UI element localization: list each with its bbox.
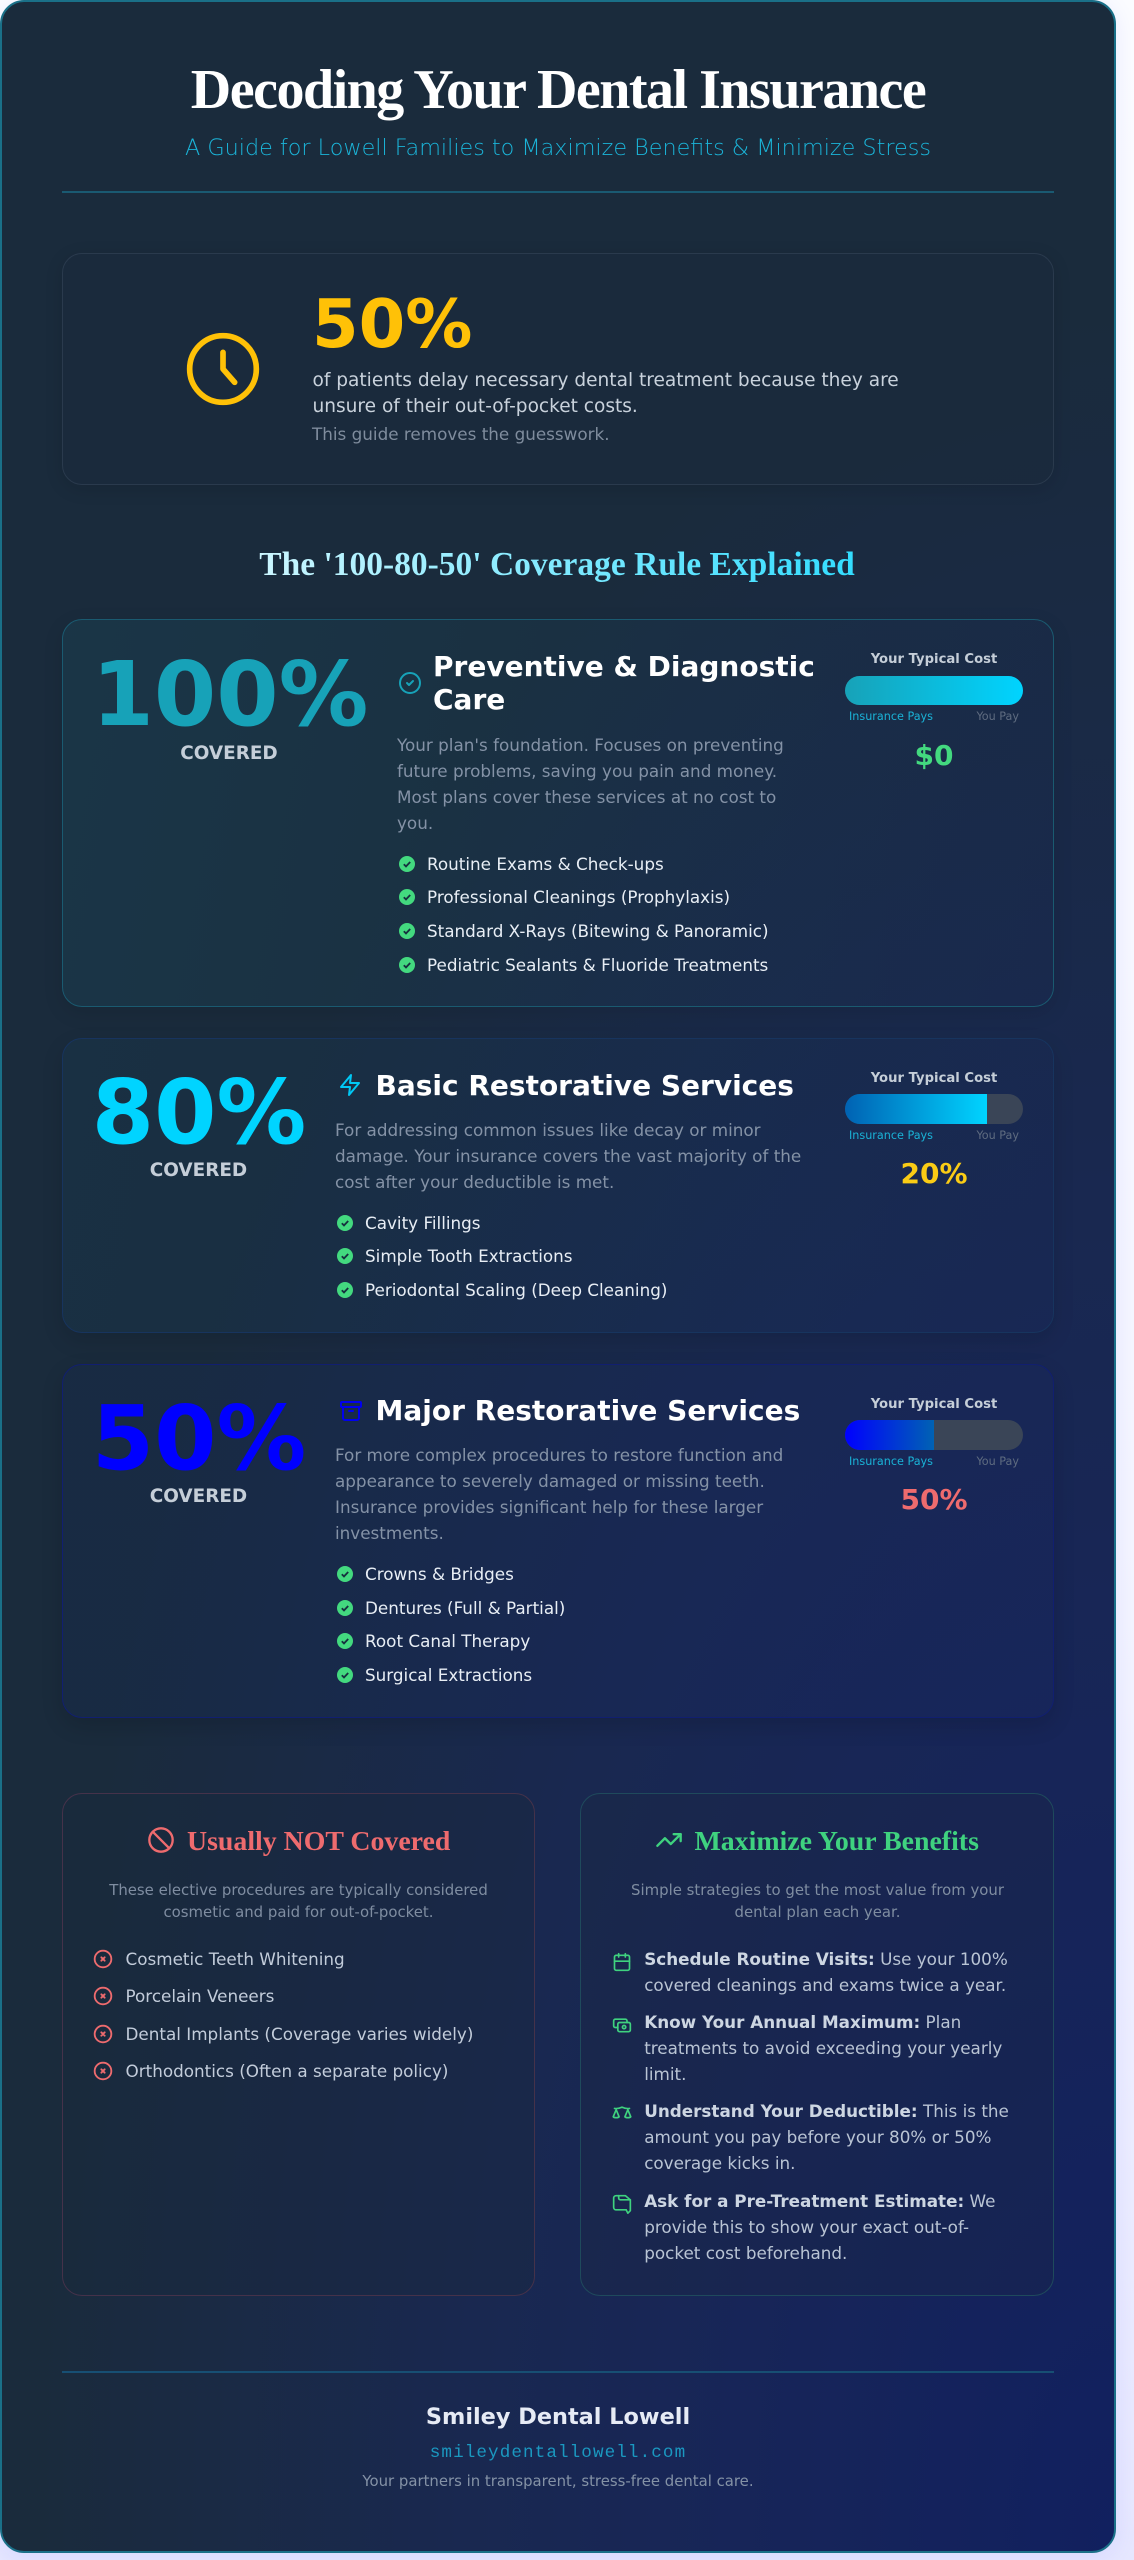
tagline: Your partners in transparent, stress-free dental care.	[362, 2472, 754, 2490]
cost value: $0	[915, 739, 953, 772]
tip text	[644, 1949, 1008, 1995]
footer divider	[62, 2371, 1054, 2373]
coverage percent: 80%	[92, 1061, 306, 1165]
list item: Crowns & Bridges	[365, 1564, 514, 1584]
panel description	[631, 1881, 1004, 1921]
statistic note: This guide removes the guesswork.	[312, 424, 610, 444]
panel heading: Maximize Your Benefits	[694, 1826, 979, 1856]
statistic number: 50%	[312, 285, 472, 363]
card heading: Basic Restorative Services	[376, 1069, 794, 1102]
tip: understand your deductible	[612, 2101, 1009, 2173]
list item: Root Canal Therapy	[365, 1631, 530, 1651]
footer	[0, 2371, 1116, 2501]
header	[62, 59, 1054, 193]
title: Decoding Your Dental Insurance	[191, 59, 925, 121]
tip text: provide this to show your exact out-of-	[644, 2217, 969, 2237]
tip text: Schedule Routine Visits: Use your 100%	[644, 1949, 1008, 1969]
cost label: Your Typical Cost	[871, 1070, 997, 1086]
panel: 80% basic restorative services	[62, 1038, 1054, 1333]
card heading: Major Restorative Services	[376, 1394, 800, 1427]
list item: Cosmetic Teeth Whitening	[126, 1949, 345, 1969]
card description	[335, 1120, 801, 1192]
icon: cash	[612, 2018, 632, 2032]
tip text: coverage kicks in.	[644, 2153, 795, 2173]
section heading: The '100-80-50' Coverage Rule Explained	[259, 546, 855, 583]
list item: Pediatric Sealants & Fluoride Treatments	[427, 954, 768, 974]
list item: Professional Cleanings (Prophylaxis)	[427, 887, 730, 907]
panel: 50% statistic hero	[62, 253, 1054, 485]
coverage label: COVERED	[150, 1160, 247, 1181]
card description	[397, 735, 784, 833]
card description: For addressing common issues like decay or minor	[335, 1120, 761, 1140]
panel description: cosmetic and paid for out-of-pocket.	[164, 1903, 434, 1921]
coverage percent: 100%	[92, 643, 368, 747]
statistic description	[312, 370, 899, 416]
statistic description: of patients delay necessary dental treatment because they are	[312, 370, 899, 390]
list: not covered items	[94, 1949, 473, 2081]
bar label: insurance pays: Insurance Pays	[849, 710, 933, 723]
card description: investments.	[335, 1523, 444, 1543]
clinic name: Smiley Dental Lowell	[426, 2404, 690, 2430]
tip text: limit.	[644, 2064, 686, 2084]
tip text	[644, 2012, 1002, 2084]
list item: Simple Tooth Extractions	[365, 1246, 573, 1266]
tip: schedule routine visits	[614, 1949, 1008, 1995]
card heading	[433, 650, 815, 716]
card description: cost after your deductible is met.	[335, 1172, 614, 1192]
tip: know your annual maximum	[612, 2012, 1002, 2084]
cost value: 50%	[900, 1483, 968, 1516]
subtitle: A Guide for Lowell Families to Maximize Benefits & Minimize Stress	[185, 134, 931, 160]
card heading: Preventive & Diagnostic	[433, 650, 815, 683]
bar label: you pay: You Pay	[976, 710, 1019, 723]
statistic description: unsure of their out-of-pocket costs.	[312, 396, 638, 416]
card description: Insurance provides significant help for these larger	[335, 1497, 763, 1517]
coverage percent: 50%	[92, 1387, 306, 1491]
panel description: Simple strategies to get the most value from your	[631, 1881, 1004, 1899]
card description: Most plans cover these services at no cost to	[397, 787, 776, 807]
cost label: Your Typical Cost	[871, 1396, 997, 1412]
icon: scale	[612, 2103, 632, 2123]
tip text: Understand Your Deductible: This is the	[644, 2101, 1009, 2121]
cost bar	[845, 1094, 1023, 1124]
panel description: These elective procedures are typically considered	[109, 1881, 488, 1899]
card description: damage. Your insurance covers the vast majority of the	[335, 1146, 801, 1166]
bar label: you pay: You Pay	[976, 1455, 1019, 1468]
coverage label: COVERED	[150, 1486, 247, 1507]
icon: ban	[148, 1827, 174, 1853]
cost value: 20%	[900, 1157, 968, 1190]
icon: calendar	[614, 1952, 630, 1972]
card description: future problems, saving you pain and money.	[397, 761, 777, 781]
card description: appearance to severely damaged or missing teeth.	[335, 1471, 765, 1491]
list: covered services	[337, 1212, 667, 1300]
list item: Dental Implants (Coverage varies widely)	[126, 2024, 473, 2044]
panel description: dental plan each year.	[734, 1903, 900, 1921]
tip text	[644, 2188, 995, 2266]
list item: Surgical Extractions	[365, 1664, 532, 1684]
tip text: amount you pay before your 80% or 50%	[644, 2127, 991, 2147]
card heading: Care	[433, 683, 505, 716]
list item: Porcelain Veneers	[126, 1986, 274, 2006]
list item: Cavity Fillings	[365, 1212, 481, 1232]
panel: usually not covered	[62, 1793, 535, 2296]
list: covered services	[399, 854, 769, 974]
list item: Orthodontics (Often a separate policy)	[126, 2061, 448, 2081]
card description: Your plan's foundation. Focuses on preventing	[397, 735, 784, 755]
coverage label: COVERED	[180, 742, 278, 764]
list item: Routine Exams & Check-ups	[427, 854, 664, 874]
list: covered services	[337, 1564, 565, 1684]
icon: trending up	[656, 1832, 682, 1848]
tip text: Ask for a Pre-Treatment Estimate: We	[644, 2191, 995, 2211]
bar label: you pay: You Pay	[976, 1129, 1019, 1142]
icon: estimate document	[612, 2194, 632, 2214]
cost label: Your Typical Cost	[871, 652, 997, 667]
tip text: treatments to avoid exceeding your yearly	[644, 2038, 1002, 2058]
bar label: insurance pays: Insurance Pays	[849, 1129, 933, 1142]
tip text: pocket cost beforehand.	[644, 2243, 847, 2263]
icon: clock	[186, 332, 260, 406]
panel: 50% major restorative services	[62, 1364, 1054, 1718]
icon: circle check	[399, 672, 421, 694]
header divider	[62, 191, 1054, 193]
tip text: covered cleanings and exams twice a year.	[644, 1975, 1006, 1995]
panel description	[109, 1881, 488, 1921]
tip: ask for a pre-treatment estimate	[612, 2188, 1032, 2266]
card description: For more complex procedures to restore function and	[335, 1445, 783, 1465]
list item: Dentures (Full & Partial)	[365, 1598, 565, 1618]
cost bar	[845, 676, 1023, 705]
tip text	[644, 2098, 1009, 2176]
icon: lightning bolt	[340, 1074, 360, 1096]
bar label: insurance pays: Insurance Pays	[849, 1455, 933, 1468]
website: smileydentallowell.com	[430, 2443, 686, 2463]
tip text: Know Your Annual Maximum: Plan	[644, 2012, 961, 2032]
icon: archive box	[340, 1401, 362, 1421]
section heading	[61, 543, 1053, 587]
list item: Standard X-Rays (Bitewing & Panoramic)	[427, 920, 769, 940]
list item: Periodontal Scaling (Deep Cleaning)	[365, 1280, 667, 1300]
panel heading: Usually NOT Covered	[187, 1826, 450, 1856]
cost bar	[845, 1420, 1023, 1450]
card description: you.	[397, 813, 433, 833]
panel: 100% preventive and diagnostic care	[62, 619, 1054, 1007]
panel: maximize your benefits	[580, 1793, 1054, 2296]
card description	[335, 1445, 783, 1543]
